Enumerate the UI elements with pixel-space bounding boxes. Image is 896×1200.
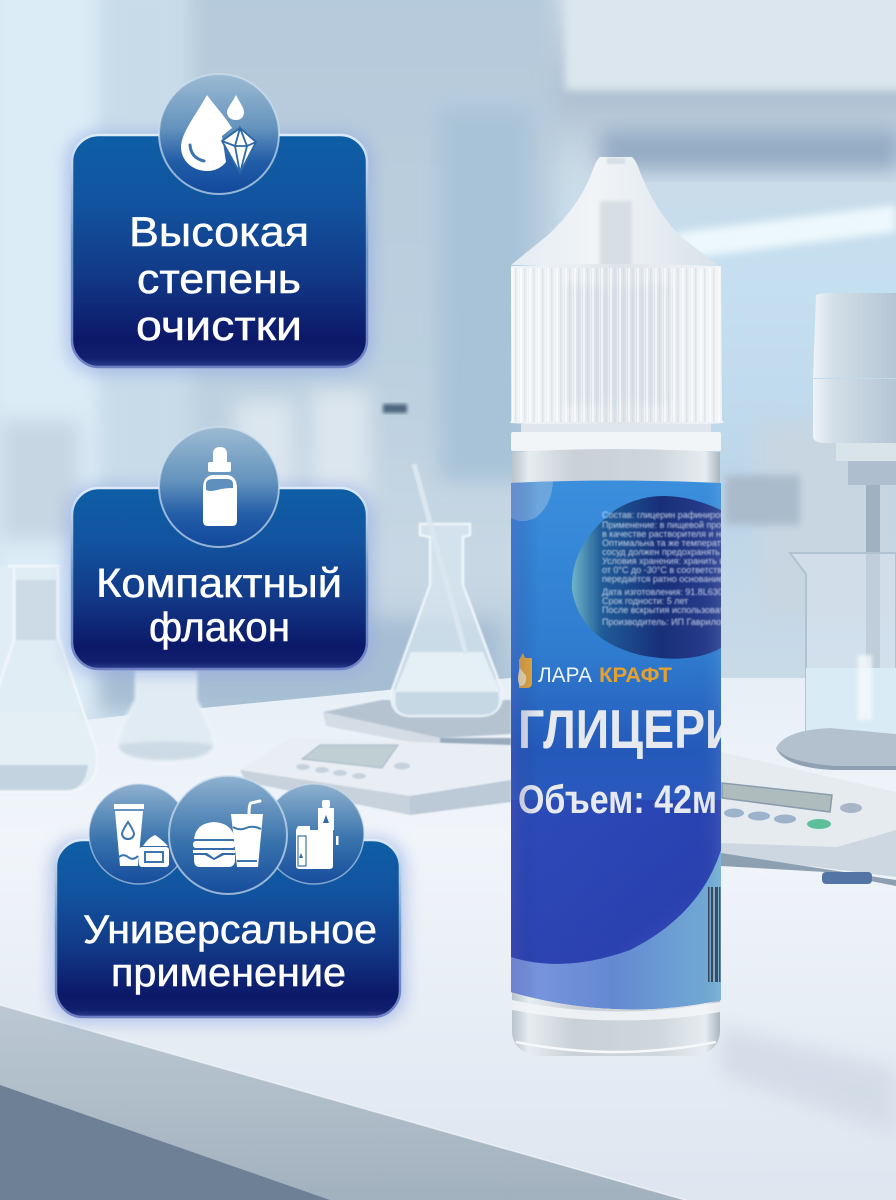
label: composition text: Срок годности: 5 лет xyxy=(602,596,688,606)
panel: compact bottle xyxy=(66,427,373,675)
label: composition text xyxy=(601,510,721,628)
label: composition text: сосуд должен предохранять от влаги xyxy=(602,547,757,557)
card body xyxy=(56,840,400,1017)
label: composition text: Состав: глицерин рафинированный раствор xyxy=(602,510,787,520)
card glow xyxy=(66,132,373,374)
bottle base highlight xyxy=(512,1000,720,1021)
heading: purity: Высокая xyxy=(129,208,309,255)
label: composition text: Условия хранения: хранить в темном xyxy=(602,556,758,566)
label: composition text: Оптимальна та же температура хранения xyxy=(602,538,777,548)
label: brand logo xyxy=(518,653,672,688)
heading: compact: флакон xyxy=(149,604,290,650)
label: lower wave xyxy=(511,850,721,1010)
card glow xyxy=(50,837,406,1023)
heading: purity: очистки xyxy=(136,302,302,349)
label: volume: Объем: 42м xyxy=(518,778,717,822)
card body xyxy=(72,488,367,669)
bottle neck xyxy=(521,424,711,433)
background: left flask xyxy=(0,566,97,792)
panel: universal application xyxy=(50,776,406,1023)
background: hot plate under center flask xyxy=(323,700,511,748)
icon badge: vape xyxy=(264,784,364,884)
label: product name: ГЛИЦЕРИН xyxy=(518,698,772,760)
icon badge: drops and diamond xyxy=(159,74,279,194)
table edge xyxy=(0,1005,720,1200)
panel: high purity xyxy=(66,74,373,374)
label: brand logo: КРАФТ xyxy=(599,664,672,687)
bottle nozzle cone xyxy=(511,157,718,265)
label: brand logo: ЛАРА xyxy=(538,664,592,687)
bottle label xyxy=(511,480,721,1010)
label: composition text: Производитель: ИП Гаврилов Андрей Сергеевич xyxy=(602,617,807,627)
background: small round flask xyxy=(117,672,214,762)
label: top-left blob xyxy=(511,478,553,521)
heading: purity: степень xyxy=(137,255,301,302)
bottle collar xyxy=(511,432,721,451)
label: dark curved panel xyxy=(505,800,721,964)
heading: universal: применение xyxy=(111,951,346,995)
bottle ribbed cap xyxy=(510,264,724,426)
label: composition text: в качестве растворителя и носителя xyxy=(602,529,754,539)
icon badge: cosmetics xyxy=(89,784,189,884)
background: right scale with display xyxy=(721,752,896,886)
label: composition text: от 0°C до -30°C в соответствии с ГОСТ xyxy=(602,565,765,575)
label: composition text: Дата изготовления: 91.8L630 xyxy=(602,587,723,597)
label: composition text: После вскрытия использовать в течение xyxy=(602,605,772,615)
heading: compact: Компактный xyxy=(96,560,342,606)
table shadow xyxy=(720,1026,896,1135)
label: dark blob behind composition text xyxy=(572,496,721,659)
heading: compact xyxy=(96,560,342,650)
icon badge: food and drink xyxy=(169,776,287,894)
background: magnetic mixer with beaker xyxy=(776,293,896,770)
card glow xyxy=(66,485,373,675)
background: white lab table xyxy=(0,678,896,1200)
icon badge: dropper bottle xyxy=(159,427,279,547)
bottle clear body xyxy=(512,449,720,1056)
heading: purity xyxy=(129,208,309,349)
background: center flask with stirring rod xyxy=(391,464,502,716)
heading: universal xyxy=(83,908,377,995)
label: composition text: Применение: в пищевой промышленности xyxy=(602,520,780,530)
heading: universal: Универсальное xyxy=(83,908,377,952)
card body xyxy=(72,135,367,367)
background: digital scale front xyxy=(240,738,511,815)
label: barcode xyxy=(708,887,720,982)
bottle xyxy=(510,157,724,1056)
label: composition text: передаётся ратно основание партии xyxy=(602,574,755,584)
